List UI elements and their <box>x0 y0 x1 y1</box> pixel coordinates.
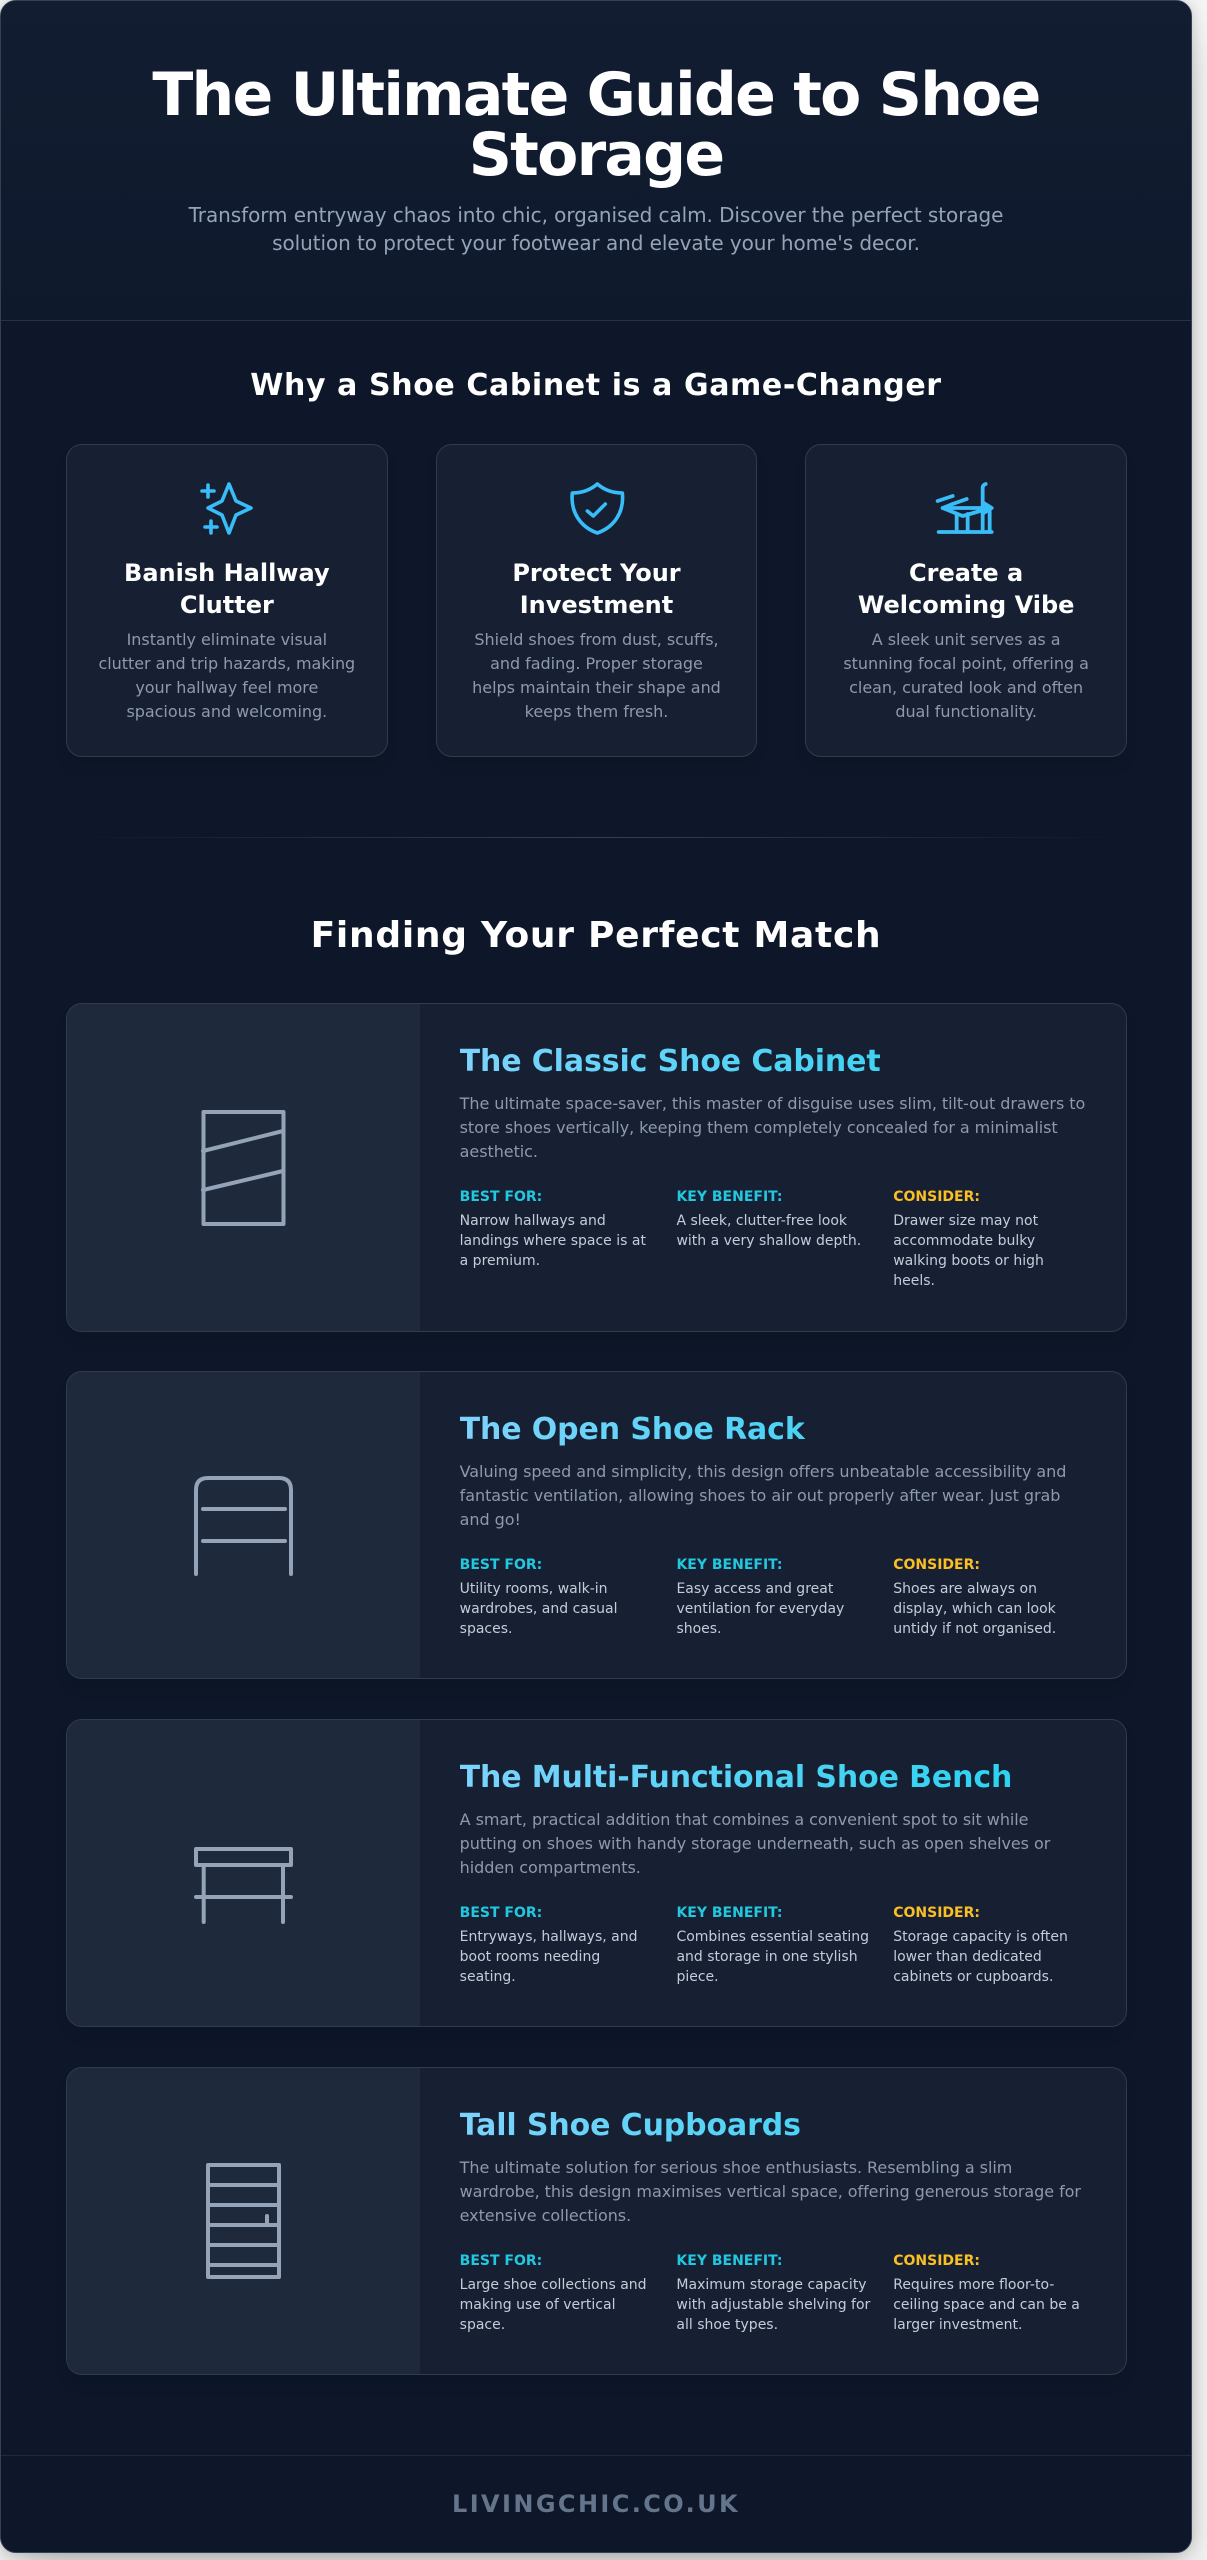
panel: tall shoe cupboards <box>66 2067 1127 2375</box>
subtitle <box>188 203 1003 255</box>
key benefit: A sleek, clutter-free look <box>676 1213 847 1229</box>
product title <box>460 1044 1086 1080</box>
best for: BEST FOR: <box>460 1557 542 1573</box>
card text <box>472 630 721 721</box>
best for: Large shoe collections and <box>460 2277 647 2293</box>
card title <box>858 559 1074 619</box>
product title: Tall Shoe Cupboards <box>460 2108 801 2143</box>
details columns <box>460 1557 1056 1637</box>
best for: spaces. <box>460 1621 512 1637</box>
consider <box>893 1905 1068 1985</box>
consider: CONSIDER: <box>893 1557 980 1573</box>
card title: Banish Hallway <box>124 559 330 587</box>
image area with cabinet icon <box>67 1004 420 1331</box>
consider <box>893 2253 1080 2333</box>
card title: Create a <box>909 559 1023 587</box>
card title: Welcoming Vibe <box>858 591 1074 619</box>
best for: Narrow hallways and <box>460 1213 606 1229</box>
key benefit: piece. <box>676 1969 719 1985</box>
product details <box>460 1412 1066 1637</box>
consider: CONSIDER: <box>893 2253 980 2269</box>
card text: and fading. Proper storage <box>490 654 703 673</box>
card text: stunning focal point, offering a <box>843 654 1089 673</box>
key benefit: Easy access and great <box>676 1581 833 1597</box>
consider: CONSIDER: <box>893 1189 980 1205</box>
product description <box>460 1810 1050 1877</box>
consider: accommodate bulky <box>893 1233 1035 1249</box>
consider: larger investment. <box>893 2317 1022 2333</box>
header <box>1 1 1191 321</box>
consider: Drawer size may not <box>893 1213 1038 1229</box>
consider: CONSIDER: <box>893 1905 980 1921</box>
product description: wardrobe, this design maximises vertical space, offering generous storage for <box>460 2182 1081 2201</box>
card text <box>843 630 1089 721</box>
product details <box>460 1760 1068 1985</box>
consider: ceiling space and can be a <box>893 2297 1080 2313</box>
card text: clutter and trip hazards, making <box>98 654 355 673</box>
card title <box>124 559 330 619</box>
consider: heels. <box>893 1273 935 1289</box>
product details <box>460 1044 1085 1289</box>
card text <box>98 630 355 721</box>
subtitle: Transform entryway chaos into chic, organised calm. Discover the perfect storage <box>189 203 1003 227</box>
key benefit <box>676 1905 869 1985</box>
product description: fantastic ventilation, allowing shoes to air out properly after wear. Just grab <box>460 1486 1060 1505</box>
heading: why a shoe cabinet: Why a Shoe Cabinet is a Game-Changer <box>250 368 942 403</box>
product title: The Open Shoe Rack <box>460 1412 805 1447</box>
card text: your hallway feel more <box>135 678 318 697</box>
best for: BEST FOR: <box>460 1905 542 1921</box>
product description: Valuing speed and simplicity, this design offers unbeatable accessibility and <box>460 1462 1066 1481</box>
product description <box>460 1462 1066 1529</box>
panel: classic shoe cabinet <box>66 1003 1127 1332</box>
product description: putting on shoes with handy storage underneath, such as open shelves or <box>460 1834 1050 1853</box>
key benefit: and storage in one stylish <box>676 1949 858 1965</box>
key benefit: Combines essential seating <box>676 1929 869 1945</box>
card text: spacious and welcoming. <box>126 702 327 721</box>
icon: chair with shoes <box>936 482 994 534</box>
footer <box>1 2455 1191 2552</box>
best for: making use of vertical <box>460 2297 615 2313</box>
card text: keeps them fresh. <box>525 702 668 721</box>
product description <box>460 2158 1081 2225</box>
card text: Instantly eliminate visual <box>127 630 327 649</box>
key benefit: ventilation for everyday <box>676 1601 844 1617</box>
title: Storage <box>469 120 723 190</box>
panel: protect your investment <box>436 444 757 757</box>
best for <box>460 2253 647 2333</box>
card title: Clutter <box>180 591 274 619</box>
consider: cabinets or cupboards. <box>893 1969 1053 1985</box>
panel: multi-functional shoe bench <box>66 1719 1127 2027</box>
card title <box>512 559 681 619</box>
consider: lower than dedicated <box>893 1949 1042 1965</box>
best for <box>460 1905 638 1985</box>
footer: LIVINGCHIC.CO.UK <box>452 2490 740 2518</box>
product description: The ultimate solution for serious shoe enthusiasts. Resembling a slim <box>460 2158 1012 2177</box>
product description: The ultimate space-saver, this master of disguise uses slim, tilt-out drawers to <box>460 1094 1085 1113</box>
consider: Storage capacity is often <box>893 1929 1068 1945</box>
key benefit <box>676 2253 870 2333</box>
key benefit: shoes. <box>676 1621 722 1637</box>
heading: finding your perfect match: Finding Your Perfect Match <box>311 915 881 956</box>
divider <box>66 837 1127 838</box>
details columns <box>460 1189 1044 1289</box>
consider: walking boots or high <box>893 1253 1044 1269</box>
product description: extensive collections. <box>460 2206 631 2225</box>
card title: Investment <box>520 591 673 619</box>
title <box>152 60 1040 190</box>
card text: dual functionality. <box>895 702 1037 721</box>
key benefit: Maximum storage capacity <box>676 2277 867 2293</box>
key benefit: KEY BENEFIT: <box>676 1557 783 1573</box>
best for: a premium. <box>460 1253 540 1269</box>
card title: Protect Your <box>512 559 681 587</box>
card text: clean, curated look and often <box>849 678 1083 697</box>
details columns <box>460 1905 1068 1985</box>
key benefit: all shoe types. <box>676 2317 778 2333</box>
product title <box>460 1412 1086 1448</box>
product description: aesthetic. <box>460 1142 538 1161</box>
panel: create a welcoming vibe <box>805 444 1127 757</box>
key benefit: with a very shallow depth. <box>676 1233 861 1249</box>
details columns <box>460 2253 1080 2333</box>
product description: and go! <box>460 1510 521 1529</box>
key benefit <box>676 1557 844 1637</box>
icon: sparkles <box>200 482 253 535</box>
image area with bench icon <box>67 1720 420 2026</box>
best for: seating. <box>460 1969 516 1985</box>
title: The Ultimate Guide to Shoe <box>152 60 1040 130</box>
product description <box>460 1094 1085 1161</box>
panel: open shoe rack <box>66 1371 1127 1679</box>
best for: boot rooms needing <box>460 1949 600 1965</box>
best for: BEST FOR: <box>460 1189 542 1205</box>
best for: Utility rooms, walk-in <box>460 1581 608 1597</box>
key benefit: KEY BENEFIT: <box>676 1905 783 1921</box>
consider <box>893 1557 1056 1637</box>
subtitle: solution to protect your footwear and elevate your home's decor. <box>272 231 920 255</box>
consider: untidy if not organised. <box>893 1621 1056 1637</box>
image area with rack icon <box>67 1372 420 1678</box>
product details <box>460 2108 1081 2333</box>
product description: hidden compartments. <box>460 1858 641 1877</box>
card text: helps maintain their shape and <box>472 678 721 697</box>
best for: landings where space is at <box>460 1233 646 1249</box>
best for: space. <box>460 2317 505 2333</box>
consider: Requires more floor-to- <box>893 2277 1054 2293</box>
best for: wardrobes, and casual <box>460 1601 618 1617</box>
consider: Shoes are always on <box>893 1581 1037 1597</box>
key benefit: with adjustable shelving for <box>676 2297 870 2313</box>
product title <box>460 2108 1086 2144</box>
best for <box>460 1189 646 1269</box>
best for: Entryways, hallways, and <box>460 1929 638 1945</box>
key benefit <box>676 1189 861 1249</box>
card text: Shield shoes from dust, scuffs, <box>474 630 719 649</box>
product description: store shoes vertically, keeping them completely concealed for a minimalist <box>460 1118 1058 1137</box>
consider <box>893 1189 1044 1289</box>
best for <box>460 1557 618 1637</box>
consider: display, which can look <box>893 1601 1056 1617</box>
product description: A smart, practical addition that combines a convenient spot to sit while <box>460 1810 1028 1829</box>
panel: banish hallway clutter <box>66 444 388 757</box>
image area with cupboard icon <box>67 2068 420 2374</box>
icon: shield check <box>570 482 624 535</box>
key benefit: KEY BENEFIT: <box>676 2253 783 2269</box>
key benefit: KEY BENEFIT: <box>676 1189 783 1205</box>
product title: The Classic Shoe Cabinet <box>460 1044 881 1079</box>
card text: A sleek unit serves as a <box>872 630 1061 649</box>
best for: BEST FOR: <box>460 2253 542 2269</box>
product title: The Multi-Functional Shoe Bench <box>460 1760 1012 1795</box>
